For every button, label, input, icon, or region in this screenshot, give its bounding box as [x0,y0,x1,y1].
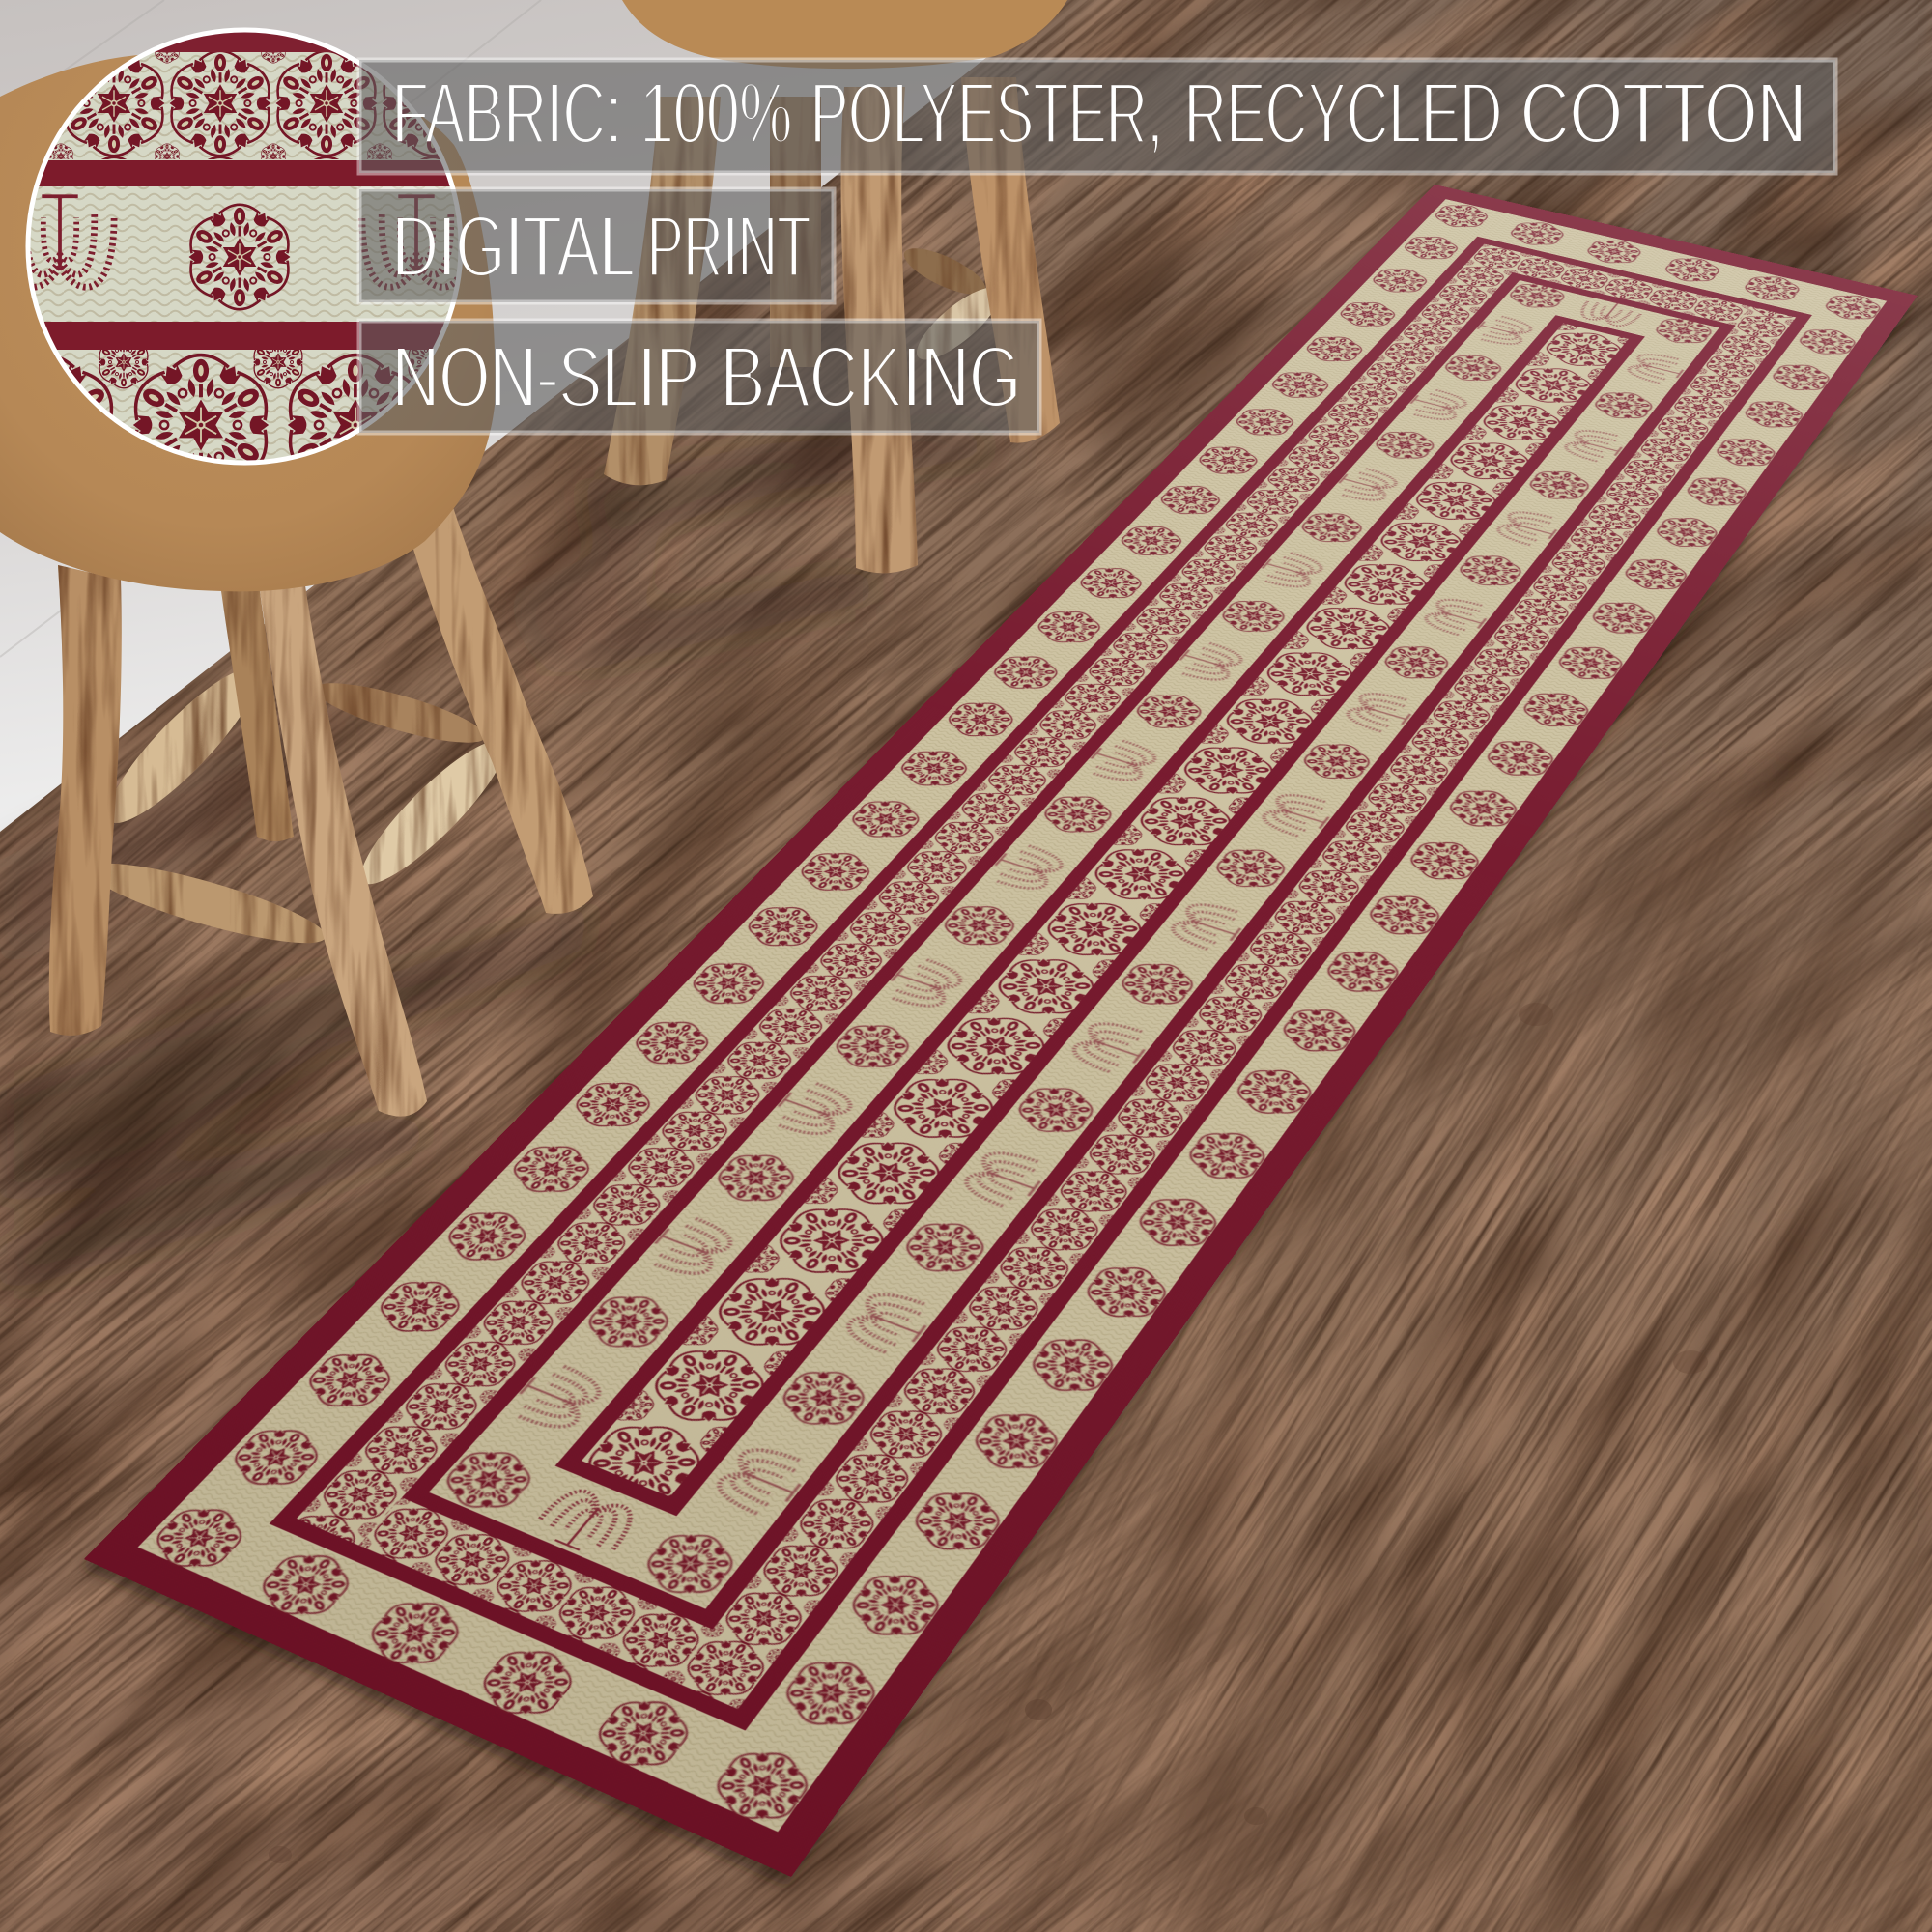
label: digital print: DIGITAL [392,199,635,296]
inner cream band with medallions and willow trees [424,278,1720,1614]
label: fabric [359,60,1835,173]
label: fabric: FABRIC: [392,66,622,162]
label: fabric: RECYCLED [1184,66,1502,162]
label: non-slip backing: BACKING [721,329,1021,426]
floor shadows cast by stools [0,425,1014,1294]
overlay: zoom inset and feature labels [25,27,1837,466]
front stool legs and stretchers [49,507,593,1117]
wall [0,0,1060,832]
second red ring [283,241,1804,1719]
label: non-slip backing: NON-SLIP [392,329,699,426]
label: fabric: COTTON [1520,66,1806,162]
back stool [604,0,1067,573]
lace pattern band [297,244,1796,1709]
center lace panel [582,324,1629,1497]
label: digital print [359,189,834,302]
inner red ring [568,319,1636,1506]
label: non-slip backing [359,321,1039,433]
outer cream band [138,199,1887,1832]
inset circle: fabric close-up [6,30,470,463]
label: digital print: PRINT [647,199,810,296]
label: fabric: POLYESTER, [810,66,1163,162]
label: fabric: 100% [640,66,792,162]
front stool seat [0,53,496,591]
third red ring [415,276,1727,1619]
